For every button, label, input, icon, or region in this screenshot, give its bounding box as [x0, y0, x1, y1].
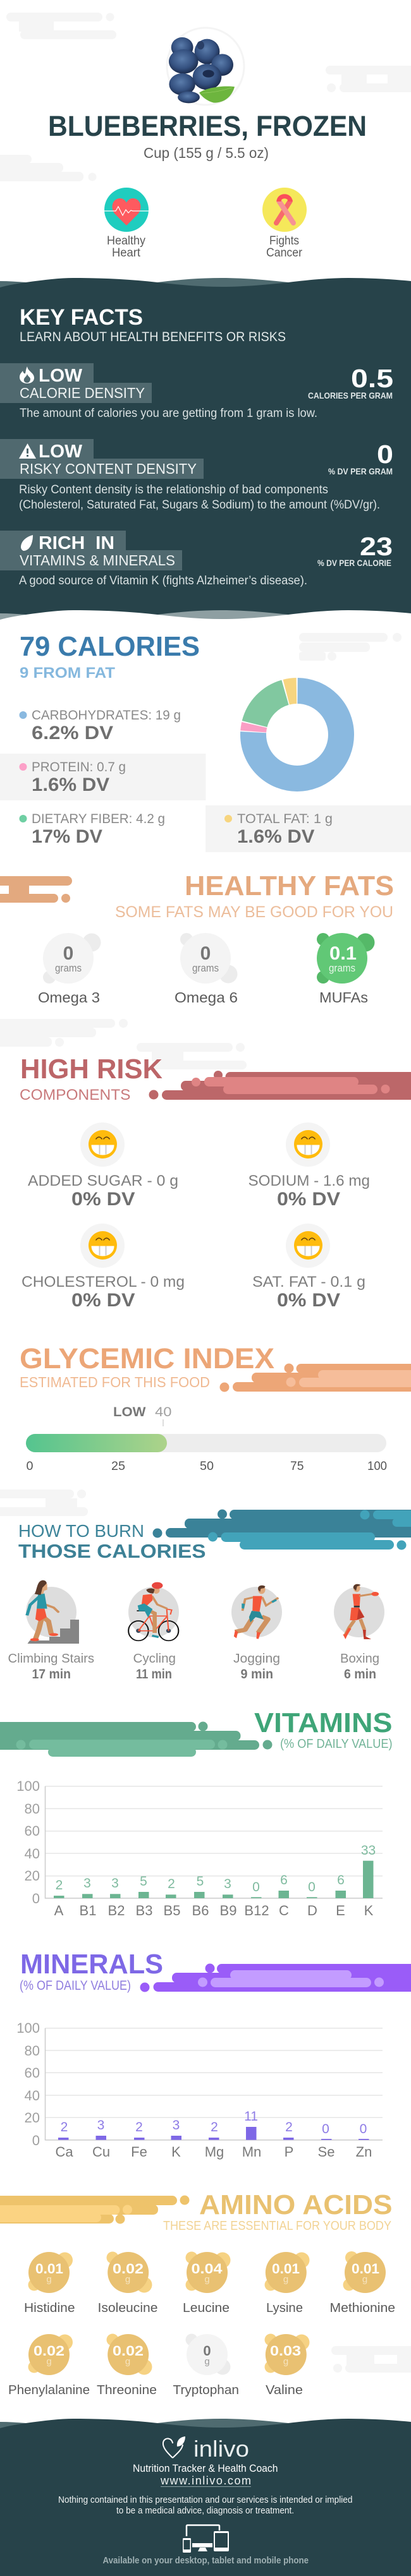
- bar chart: vitamins: 100: [16, 1778, 40, 1794]
- amino acid: valine: g: [283, 2356, 288, 2367]
- activity: cycling: 11 min: [136, 1667, 172, 1682]
- bar chart: vitamins: 2: [56, 1878, 63, 1893]
- bar chart: minerals: 0: [32, 2133, 40, 2148]
- fact: rich in vitamins and minerals: RICH IN: [39, 533, 114, 553]
- activity: jogging: 9 min: [240, 1667, 273, 1682]
- amino acid: histidine: g: [46, 2274, 52, 2285]
- bar chart: minerals: Zn: [356, 2144, 372, 2160]
- activity: climbing stairs: Climbing Stairs: [8, 1652, 94, 1666]
- bar chart: vitamins: 0: [308, 1880, 316, 1894]
- amino acid: phenylalanine: g: [46, 2356, 52, 2367]
- amino acid: lysine: [264, 2252, 310, 2315]
- bar chart: minerals: [16, 2020, 383, 2160]
- legend: carbohydrates: CARBOHYDRATES: 19 g: [32, 708, 181, 723]
- subheading: (% OF DAILY VALUE): [280, 1737, 392, 1751]
- bar chart: minerals: 3: [97, 2118, 104, 2133]
- fact: rich in vitamins and minerals: 23: [360, 532, 393, 561]
- bar chart: vitamins: B9: [220, 1903, 236, 1918]
- benefit: healthy heart: Heart: [112, 246, 141, 260]
- legend: dietary fiber: [19, 812, 165, 847]
- bar chart: minerals: 2: [135, 2120, 143, 2134]
- panel: minerals: [16, 1949, 411, 2160]
- item: saturated fat: 0% DV: [277, 1290, 340, 1311]
- legend: carbohydrates: 6.2% DV: [32, 723, 113, 743]
- tagline: Nutrition Tracker & Health Coach: [133, 2462, 278, 2474]
- bar chart: minerals: 0: [360, 2122, 367, 2136]
- amino acid: tryptophan: g: [204, 2356, 210, 2367]
- bar chart: vitamins: 6: [337, 1873, 345, 1887]
- bar chart: minerals: 20: [25, 2110, 40, 2126]
- subheading: from fat: 9 FROM FAT: [20, 665, 115, 682]
- item: saturated fat: [252, 1224, 365, 1311]
- fact: risky content density: Risky Content density is the relationship of bad components: [19, 483, 328, 497]
- bar chart: minerals: K: [171, 2144, 181, 2160]
- activity: cycling: Cycling: [133, 1652, 176, 1666]
- bar chart: minerals: 2: [61, 2120, 68, 2134]
- decorative header blob: [149, 1071, 411, 1100]
- serving size: Cup (155 g / 5.5 oz): [144, 145, 269, 161]
- bar chart: minerals: Mg: [205, 2144, 224, 2160]
- bar chart: vitamins: 5: [140, 1874, 147, 1889]
- subheading: ESTIMATED FOR THIS FOOD: [20, 1374, 210, 1390]
- activity: boxing: [334, 1584, 384, 1682]
- panel: high risk components: [20, 1054, 411, 1311]
- bar chart: minerals: 40: [25, 2088, 40, 2104]
- legend: total fat: TOTAL FAT: 1 g: [237, 812, 333, 826]
- amino acid: tryptophan: Tryptophan: [173, 2383, 239, 2397]
- bar chart: vitamins: B6: [192, 1903, 209, 1918]
- food image: blueberries: [167, 28, 244, 105]
- amino acid: histidine: 0.01: [35, 2261, 63, 2277]
- decorative header blob: [140, 1963, 411, 1992]
- bar chart: vitamins: [16, 1778, 383, 1918]
- benefit: fights cancer: Fights: [269, 234, 299, 248]
- bar chart: minerals: 80: [25, 2043, 40, 2059]
- heading: vitamins: VITAMINS: [254, 1707, 392, 1738]
- bar chart: vitamins: 3: [111, 1876, 119, 1891]
- item: cholesterol: 0% DV: [71, 1290, 135, 1311]
- amino acid: threonine: g: [125, 2356, 130, 2367]
- legend: protein: [0, 754, 206, 800]
- activity: jogging: [231, 1586, 282, 1682]
- benefit: healthy heart: Healthy: [107, 234, 145, 248]
- bar chart: vitamins: 0: [32, 1891, 40, 1906]
- activity: cycling: [128, 1582, 179, 1682]
- item: sodium: 0% DV: [277, 1189, 340, 1210]
- stat: mufas: 0.1: [329, 943, 357, 964]
- amino acid: tryptophan: [173, 2333, 239, 2397]
- bar chart: vitamins: E: [336, 1903, 345, 1918]
- fact: rich in vitamins and minerals: [0, 531, 393, 587]
- bar chart: vitamins: B12: [244, 1903, 269, 1918]
- amino acid: threonine: Threonine: [97, 2383, 157, 2397]
- bar chart: vitamins: B5: [164, 1903, 180, 1918]
- stat: omega 3: Omega 3: [38, 989, 100, 1006]
- benefit: fights cancer: [262, 188, 307, 260]
- amino acid: lysine: Lysine: [266, 2301, 303, 2315]
- bar chart: vitamins: B3: [136, 1903, 152, 1918]
- item: added sugar: 0% DV: [71, 1189, 135, 1210]
- bar chart: minerals: P: [285, 2144, 293, 2160]
- amino acid: methionine: g: [362, 2274, 367, 2285]
- fact: risky content density: % DV PER GRAM: [328, 466, 393, 476]
- bar chart: vitamins: B1: [80, 1903, 96, 1918]
- bar chart: minerals: Se: [318, 2144, 334, 2160]
- fact: calorie density: CALORIES PER GRAM: [308, 390, 393, 400]
- heading: minerals: MINERALS: [20, 1949, 163, 1980]
- gauge marker label: 40: [155, 1405, 172, 1419]
- bar chart: minerals: Fe: [131, 2144, 147, 2160]
- disclaimer: [58, 2495, 353, 2516]
- fact: rich in vitamins and minerals: A good source of Vitamin K (fights Alzheimer’s disease).: [19, 574, 307, 587]
- benefit: fights cancer: Cancer: [266, 246, 303, 260]
- disclaimer: to be a medical advice, diagnosis or treatment.: [116, 2505, 294, 2516]
- decorative header blob: [0, 876, 72, 903]
- panel: key facts: [0, 278, 411, 629]
- fact: risky content density: LOW: [39, 442, 83, 462]
- decorative header blob: [0, 2196, 190, 2224]
- legend: dietary fiber: 17% DV: [32, 826, 102, 847]
- subheading: LEARN ABOUT HEALTH BENEFITS OR RISKS: [20, 330, 286, 344]
- legend: carbohydrates: [19, 708, 181, 743]
- icon: devices: [183, 2525, 229, 2553]
- legend: total fat: [206, 805, 411, 852]
- bar chart: minerals: Mn: [242, 2144, 261, 2160]
- panel: footer: [0, 2419, 411, 2576]
- heading: healthy fats: HEALTHY FATS: [185, 870, 394, 901]
- amino acid: lysine: 0.01: [272, 2261, 300, 2277]
- stat: omega 6: [175, 933, 238, 1006]
- fact: rich in vitamins and minerals: % DV PER CALORIE: [317, 558, 391, 568]
- subheading: THESE ARE ESSENTIAL FOR YOUR BODY: [163, 2219, 391, 2233]
- subheading: components: COMPONENTS: [20, 1086, 130, 1104]
- bar chart: vitamins: 40: [25, 1846, 40, 1862]
- amino acid: valine: Valine: [266, 2383, 303, 2397]
- legend: protein: PROTEIN: 0.7 g: [32, 760, 126, 774]
- amino acid: phenylalanine: 0.02: [34, 2343, 64, 2359]
- legend: total fat: 1.6% DV: [237, 826, 315, 847]
- activity: climbing stairs: [8, 1580, 94, 1682]
- item: added sugar: ADDED SUGAR - 0 g: [28, 1172, 178, 1189]
- gauge scale: 75: [290, 1460, 304, 1473]
- decorative header blob: [220, 1363, 411, 1392]
- amino acid: leucine: [183, 2251, 230, 2315]
- panel: glycemic index: [20, 1342, 411, 1473]
- subheading: (% OF DAILY VALUE): [20, 1978, 131, 1993]
- bar chart: vitamins: 2: [168, 1877, 175, 1891]
- activity: boxing: Boxing: [340, 1652, 379, 1666]
- panel: calories: [0, 631, 411, 852]
- panel: how to burn those calories: [8, 1510, 411, 1682]
- subheading: SOME FATS MAY BE GOOD FOR YOU: [115, 903, 393, 921]
- icon: inlivo logo: inlivo: [193, 2436, 249, 2462]
- amino acid: leucine: g: [204, 2274, 210, 2285]
- bar chart: vitamins: 60: [25, 1823, 40, 1839]
- amino acid: phenylalanine: Phenylalanine: [8, 2383, 90, 2397]
- item: saturated fat: SAT. FAT - 0.1 g: [252, 1273, 365, 1291]
- bar chart: vitamins: 33: [361, 1843, 376, 1858]
- panel: amino acids: [0, 2189, 395, 2397]
- fact: risky content density: (Cholesterol, Saturated Fat, Sugars & Sodium) to the amount (%DV/gr).: [19, 498, 380, 512]
- amino acid: methionine: 0.01: [352, 2261, 379, 2277]
- gauge scale: [27, 1460, 387, 1473]
- bar chart: vitamins: 20: [25, 1868, 40, 1884]
- bar chart: vitamins: 3: [83, 1876, 91, 1891]
- disclaimer: Nothing contained in this presentation and our services is intended or implied: [58, 2495, 353, 2505]
- amino acid: valine: [264, 2333, 310, 2397]
- amino acid: threonine: [97, 2333, 157, 2397]
- decorative header blob: [0, 1722, 272, 1757]
- amino acid: phenylalanine: [8, 2334, 90, 2397]
- amino acid: isoleucine: [97, 2251, 158, 2315]
- fact: rich in vitamins and minerals: VITAMINS & MINERALS: [20, 552, 175, 569]
- item: cholesterol: CHOLESTEROL - 0 mg: [21, 1273, 185, 1291]
- stat: mufas: MUFAs: [319, 989, 368, 1006]
- title: BLUEBERRIES, FROZEN: [48, 110, 367, 142]
- gauge scale: 25: [111, 1460, 125, 1473]
- bar chart: minerals: Ca: [55, 2144, 73, 2160]
- heading: amino acids: AMINO ACIDS: [199, 2189, 392, 2220]
- heading: key facts: KEY FACTS: [20, 305, 143, 330]
- amino acid: threonine: 0.02: [113, 2343, 144, 2359]
- legend: dietary fiber: DIETARY FIBER: 4.2 g: [32, 812, 165, 826]
- activity: climbing stairs: 17 min: [32, 1667, 71, 1682]
- amino acid: leucine: Leucine: [183, 2301, 230, 2315]
- decorative header blob: [153, 1510, 411, 1550]
- amino acid: isoleucine: 0.02: [113, 2261, 144, 2277]
- bar chart: minerals: Cu: [92, 2144, 110, 2160]
- gauge marker label: LOW: [113, 1405, 146, 1419]
- heading: calories: 79 CALORIES: [20, 631, 200, 662]
- amino acid: histidine: Histidine: [24, 2301, 75, 2315]
- bar chart: vitamins: D: [307, 1903, 317, 1918]
- stat: omega 6: Omega 6: [175, 989, 238, 1006]
- amino acid: valine: 0.03: [270, 2343, 301, 2359]
- amino acid: histidine: [24, 2252, 75, 2315]
- bar chart: minerals: 60: [25, 2065, 40, 2081]
- availability note: Available on your desktop, tablet and mobile phone: [102, 2555, 309, 2566]
- bar chart: minerals: 2: [211, 2120, 218, 2134]
- bar chart: vitamins: 80: [25, 1801, 40, 1817]
- amino acid: isoleucine: Isoleucine: [97, 2301, 158, 2315]
- stat: omega 3: 0: [63, 943, 73, 964]
- gauge scale: 50: [200, 1460, 214, 1473]
- heading line 2: THOSE CALORIES: [18, 1540, 206, 1562]
- bar chart: vitamins: B2: [108, 1903, 125, 1918]
- fact: risky content density: [0, 439, 393, 512]
- gauge scale: 100: [367, 1460, 387, 1473]
- amino acid: methionine: Methionine: [330, 2301, 395, 2315]
- bar chart: vitamins: 3: [224, 1877, 231, 1891]
- amino acid: isoleucine: g: [125, 2274, 130, 2285]
- panel: vitamins: [0, 1707, 392, 1918]
- amino acid: methionine: [330, 2251, 395, 2315]
- bar chart: minerals: 11: [244, 2109, 258, 2124]
- legend: protein: 1.6% DV: [32, 774, 109, 795]
- bar chart: vitamins: A: [54, 1903, 64, 1918]
- fact: calorie density: CALORIE DENSITY: [20, 385, 145, 401]
- bar chart: minerals: 100: [16, 2020, 40, 2036]
- stat: mufas: [317, 933, 374, 1006]
- amino acid: lysine: g: [283, 2274, 288, 2285]
- stat: omega 3: grams: [55, 962, 82, 974]
- stat: mufas: grams: [329, 962, 355, 974]
- fact: calorie density: 0.5: [351, 364, 393, 393]
- gauge marker label: [113, 1405, 172, 1426]
- item: cholesterol: [21, 1224, 185, 1311]
- bar chart: vitamins: C: [279, 1903, 289, 1918]
- bar chart: vitamins: 6: [280, 1873, 288, 1887]
- amino acid: leucine: 0.04: [191, 2261, 223, 2277]
- heading: glycemic index: GLYCEMIC INDEX: [20, 1342, 274, 1375]
- fact: calorie density: The amount of calories you are getting from 1 gram is low.: [20, 407, 317, 420]
- icon: inlivo logo: [163, 2436, 249, 2462]
- bar chart: minerals: 0: [322, 2122, 329, 2136]
- benefit: healthy heart: [104, 188, 149, 260]
- panel: healthy fats: [0, 870, 394, 1006]
- gauge scale: 0: [27, 1460, 33, 1473]
- amino acid: tryptophan: 0: [203, 2343, 211, 2359]
- stat: omega 6: 0: [200, 943, 211, 964]
- bar chart: minerals: 2: [285, 2120, 293, 2134]
- fact: calorie density: [0, 363, 393, 420]
- item: added sugar: [28, 1122, 178, 1210]
- website link: www.inlivo.com: [160, 2474, 251, 2487]
- stat: omega 6: grams: [192, 962, 219, 974]
- heading: high risk: HIGH RISK: [20, 1054, 163, 1085]
- stat: omega 3: [38, 933, 101, 1006]
- bar chart: vitamins: 5: [197, 1874, 204, 1889]
- activity: boxing: 6 min: [344, 1667, 376, 1682]
- heading line 1: HOW TO BURN: [18, 1521, 144, 1541]
- fact: risky content density: RISKY CONTENT DENSITY: [20, 460, 197, 477]
- bar chart: vitamins: K: [364, 1903, 374, 1918]
- donut chart: [253, 691, 341, 778]
- fact: risky content density: 0: [377, 440, 393, 469]
- gauge bar: [26, 1434, 386, 1452]
- item: sodium: [248, 1122, 370, 1210]
- bar chart: minerals: 3: [173, 2118, 180, 2133]
- fact: calorie density: LOW: [39, 366, 83, 386]
- item: sodium: SODIUM - 1.6 mg: [248, 1172, 370, 1189]
- bar chart: vitamins: 0: [252, 1880, 260, 1894]
- activity: jogging: Jogging: [233, 1652, 280, 1666]
